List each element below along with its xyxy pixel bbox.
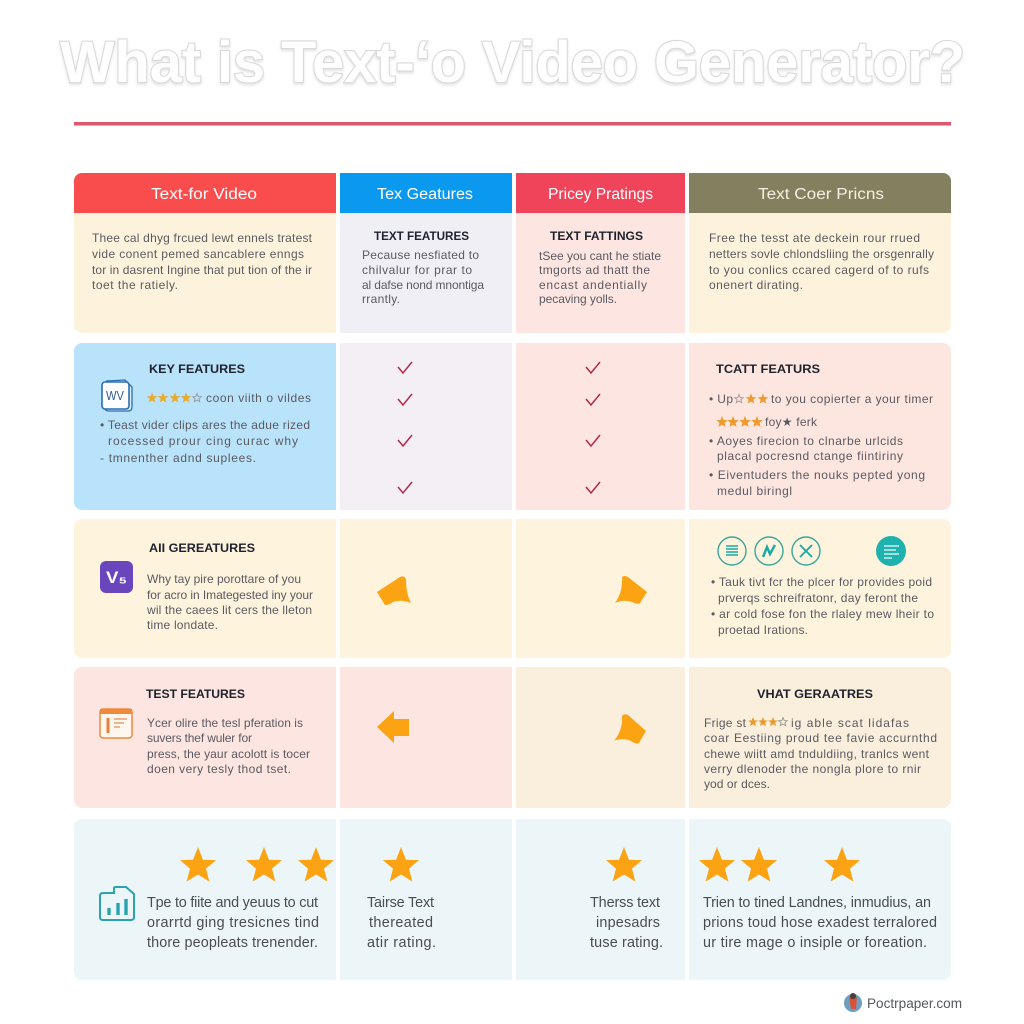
panel: tcatt features: to you copierter a your timer <box>771 392 933 406</box>
icon: orange arrow shape <box>377 576 411 605</box>
panel: intro column 3: tSee you cant he stiate <box>539 249 661 263</box>
panel: ai features: for acro in Imategested iny your <box>147 588 313 602</box>
panel: intro column 4: to you conlics ccared cagerd of to rufs <box>709 263 929 277</box>
panel: intro column 3 <box>516 213 685 333</box>
panel: vhat geraatres: ig able scat lidafas <box>791 716 909 730</box>
panel: intro column 2 <box>340 213 512 333</box>
header: column 1: Text-for Video <box>151 186 257 203</box>
panel: test features: Ycer olire the tesl pferation is <box>147 716 303 730</box>
panel: ai features: wil the caees lit cers the lleton <box>146 603 312 617</box>
panel: vhat geraatres: coar Eestiing proud tee favie accurnthd <box>704 731 937 745</box>
icon: orange arrow shape <box>615 576 647 604</box>
rating stars <box>147 392 201 403</box>
rating star <box>606 847 642 882</box>
panel: rating column 3 <box>516 819 685 980</box>
panel: key features: coon viith o vildes <box>206 391 311 405</box>
panel: intro column 4: onenert dirating. <box>709 278 803 292</box>
panel: rating column 4 <box>689 819 951 980</box>
icon: chart file <box>100 887 134 920</box>
panel: vhat geraatres: chewe wiitt amd tnduldiing, tranlcs went <box>704 747 930 761</box>
header: column 2: Tex Geatures <box>377 186 473 203</box>
icon: orange window <box>100 709 132 738</box>
panel: checks column 2 <box>340 343 512 510</box>
panel: intro column 4: Free the tesst ate deckein rour rrued <box>709 231 920 245</box>
panel: circle icons <box>689 519 951 658</box>
panel: circle icons: • ar cold fose fon the rlaley mew lheir to <box>711 607 934 621</box>
panel: rating column 2: Tairse Text <box>367 895 434 911</box>
panel: intro column 3: TEXT FATTINGS <box>550 229 643 243</box>
heading: key features: KEY FEATURES <box>149 362 245 376</box>
panel: intro column 2: Pecause nesfiated to <box>362 248 479 262</box>
header: column 1 <box>74 173 336 213</box>
panel: rating column 2 <box>340 819 512 980</box>
header: column 4 <box>689 173 951 213</box>
panel: ai features: Why tay pire porottare of you <box>147 572 301 586</box>
panel: test features: suvers thef wuler for <box>147 731 252 745</box>
panel: rating column 3: Therss text <box>590 895 660 911</box>
panel: tcatt features <box>689 343 951 510</box>
panel: rating column 1: orarrtd ging tresicnes tind <box>147 915 319 931</box>
panel: intro column 2: chilvalur for prar to <box>362 263 472 277</box>
panel: tcatt features: • Aoyes firecion to clnarbe urlcids <box>709 434 903 448</box>
panel: rating column 4: ur tire mage o insiple or foreation. <box>703 935 927 951</box>
panel: rating column 3: tuse rating. <box>590 935 663 951</box>
panel: intro column 1 <box>74 213 336 333</box>
panel: arrow column 2 row 3 <box>340 519 512 658</box>
panel: key features <box>74 343 336 510</box>
panel: rating column 4: prions toud hose exadest terralored <box>703 915 937 931</box>
panel: tcatt features: foy★ ferk <box>765 415 818 429</box>
panel: circle icons: proetad Irations. <box>718 623 808 637</box>
panel: intro column 4 <box>689 213 951 333</box>
panel: intro column 3: pecaving yolls. <box>539 292 617 306</box>
panel: arrow column 3 row 4 <box>516 667 685 808</box>
panel: intro column 3: tmgorts ad thatt the <box>539 263 650 277</box>
panel: ai features: AII GEREATURES <box>149 541 255 555</box>
panel: rating column 1 <box>74 819 336 980</box>
panel: checks column 3 <box>516 343 685 510</box>
footer logo: Poctrpaper.com <box>867 996 962 1011</box>
panel: circle icons: • Tauk tivt fcr the plcer for provides poid <box>711 575 932 589</box>
check marks <box>586 362 600 493</box>
footer logo <box>844 993 962 1012</box>
panel: test features: TEST FEATURES <box>146 687 245 701</box>
panel: arrow column 3 row 3 <box>516 519 685 658</box>
panel: tcatt features: placal pocresnd ctange fiintiriny <box>717 449 903 463</box>
panel: key features: • Teast vider clips ares the adue rized <box>100 418 310 432</box>
panel: intro column 4: netters sovle chlondsliing the orsgenrally <box>709 247 934 261</box>
panel: intro column 3: encast andentially <box>539 278 647 292</box>
panel: vhat geraatres: yod or dces. <box>704 777 770 791</box>
title underline <box>74 122 951 126</box>
icon: document <box>102 380 132 411</box>
panel: key features: rocessed prour cing curac why <box>108 434 298 448</box>
panel: intro column 1: tor in dasrent Ingine that put tion of the ir <box>92 263 312 277</box>
panel: rating column 1: thore peopleats trenender. <box>147 935 318 951</box>
panel: test features: doen very tesly thod tset. <box>147 762 291 776</box>
panel: intro column 1: toet the ratiely. <box>92 278 178 292</box>
panel: tcatt features: • Up <box>709 392 733 406</box>
panel: test features: press, the yaur acolott is tocer <box>147 747 310 761</box>
icon: document: WV <box>106 389 125 403</box>
rating stars <box>716 394 768 427</box>
panel: intro column 2: TEXT FEATURES <box>374 229 469 243</box>
rating star <box>383 847 419 882</box>
panel: rating column 1: Tpe to fiite and yeuus to cut <box>147 895 318 911</box>
panel: ai features <box>74 519 336 658</box>
panel: ai features: time londate. <box>147 618 218 632</box>
panel: rating column 2: thereated <box>369 915 433 931</box>
panel: key features: - tmnenther adnd suplees. <box>100 451 256 465</box>
rating stars <box>748 717 787 726</box>
panel: tcatt features: medul biringl <box>717 484 792 498</box>
icon: left arrow <box>377 711 409 743</box>
panel: rating column 2: atir rating. <box>367 935 436 951</box>
rating stars <box>699 847 860 882</box>
panel: rating column 4: Trien to tined Landnes, inmudius, an <box>703 895 931 911</box>
icon: purple badge <box>100 561 133 593</box>
panel: circle icons: prverqs schreifratonr, day feront the <box>718 591 918 605</box>
panel: rating column 3: inpesadrs <box>596 915 660 931</box>
header: column 3: Pricey Pratings <box>548 186 653 203</box>
panel: vhat geraatres: VHAT GERAATRES <box>757 687 873 701</box>
panel: test features <box>74 667 336 808</box>
header: column 2 <box>340 173 512 213</box>
panel: vhat geraatres: verry dlenoder the nongla plore to rnir <box>704 762 921 776</box>
icon row: teal circles <box>718 536 906 566</box>
panel: intro column 2: al dafse nond mnontiga <box>362 278 484 292</box>
panel: intro column 2: rrantly. <box>362 292 400 306</box>
check marks <box>398 362 412 493</box>
panel: arrow column 2 row 4 <box>340 667 512 808</box>
rating stars <box>180 847 334 882</box>
panel: intro column 1: Thee cal dhyg frcued lewt ennels tratest <box>92 231 313 245</box>
panel: vhat geraatres: Frige st <box>704 716 747 730</box>
title: What is Text-‘o Video Generator? <box>60 30 965 95</box>
panel: tcatt features: • Eiventuders the nouks pepted yong <box>709 468 925 482</box>
icon: purple badge: V₅ <box>106 568 127 587</box>
icon: orange arrow shape <box>614 714 646 744</box>
panel: vhat geraatres <box>689 667 951 808</box>
header: column 3 <box>516 173 685 213</box>
header: column 4: Text Coer Pricns <box>758 186 884 203</box>
panel: intro column 1: vide conent pemed sancablere enngs <box>92 247 304 261</box>
panel: tcatt features: TCATT FEATURS <box>716 362 820 376</box>
